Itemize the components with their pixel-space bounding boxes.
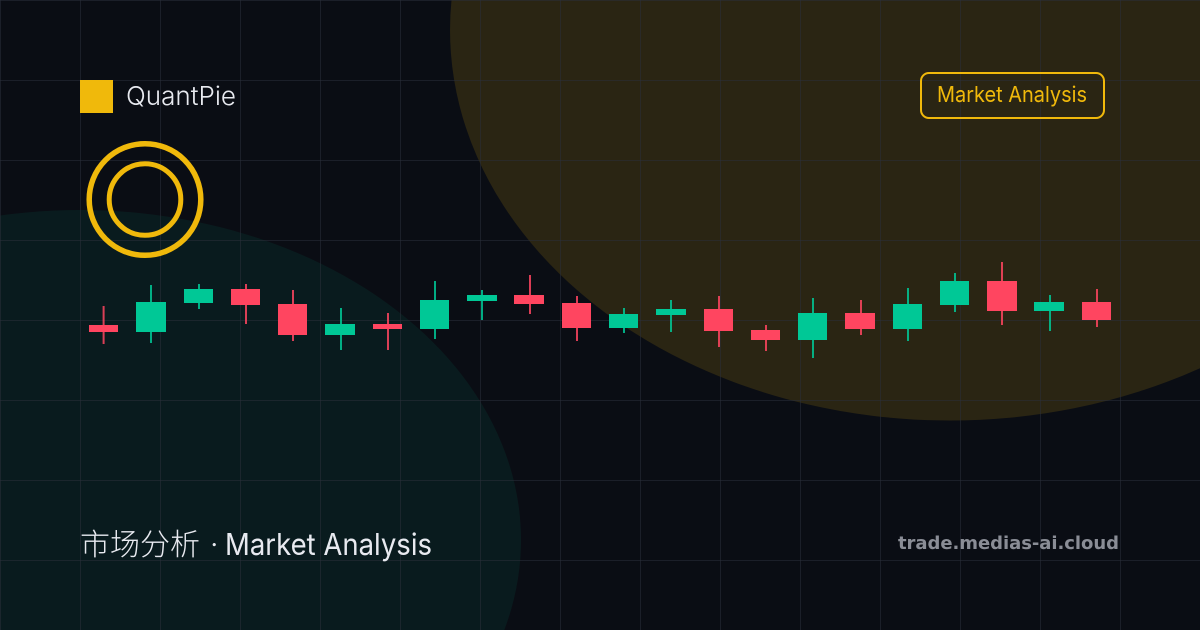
decorative yellow ellipse, top right xyxy=(450,0,1200,421)
brand name: QuantPie xyxy=(126,81,236,112)
badge: Market Analysis: Market Analysis xyxy=(937,82,1087,108)
badge: Market Analysis xyxy=(921,73,1104,118)
footer domain: trade.medias-ai.cloud xyxy=(898,533,1119,554)
title: Market Analysis xyxy=(225,527,432,563)
icon: concentric rings xyxy=(89,144,201,255)
logo: yellow square xyxy=(80,80,113,113)
candlestick chart xyxy=(89,262,1111,358)
title xyxy=(80,520,432,564)
decorative green ellipse, bottom left xyxy=(0,210,521,630)
title: · xyxy=(210,527,218,563)
title: 市场分析 xyxy=(80,520,200,564)
